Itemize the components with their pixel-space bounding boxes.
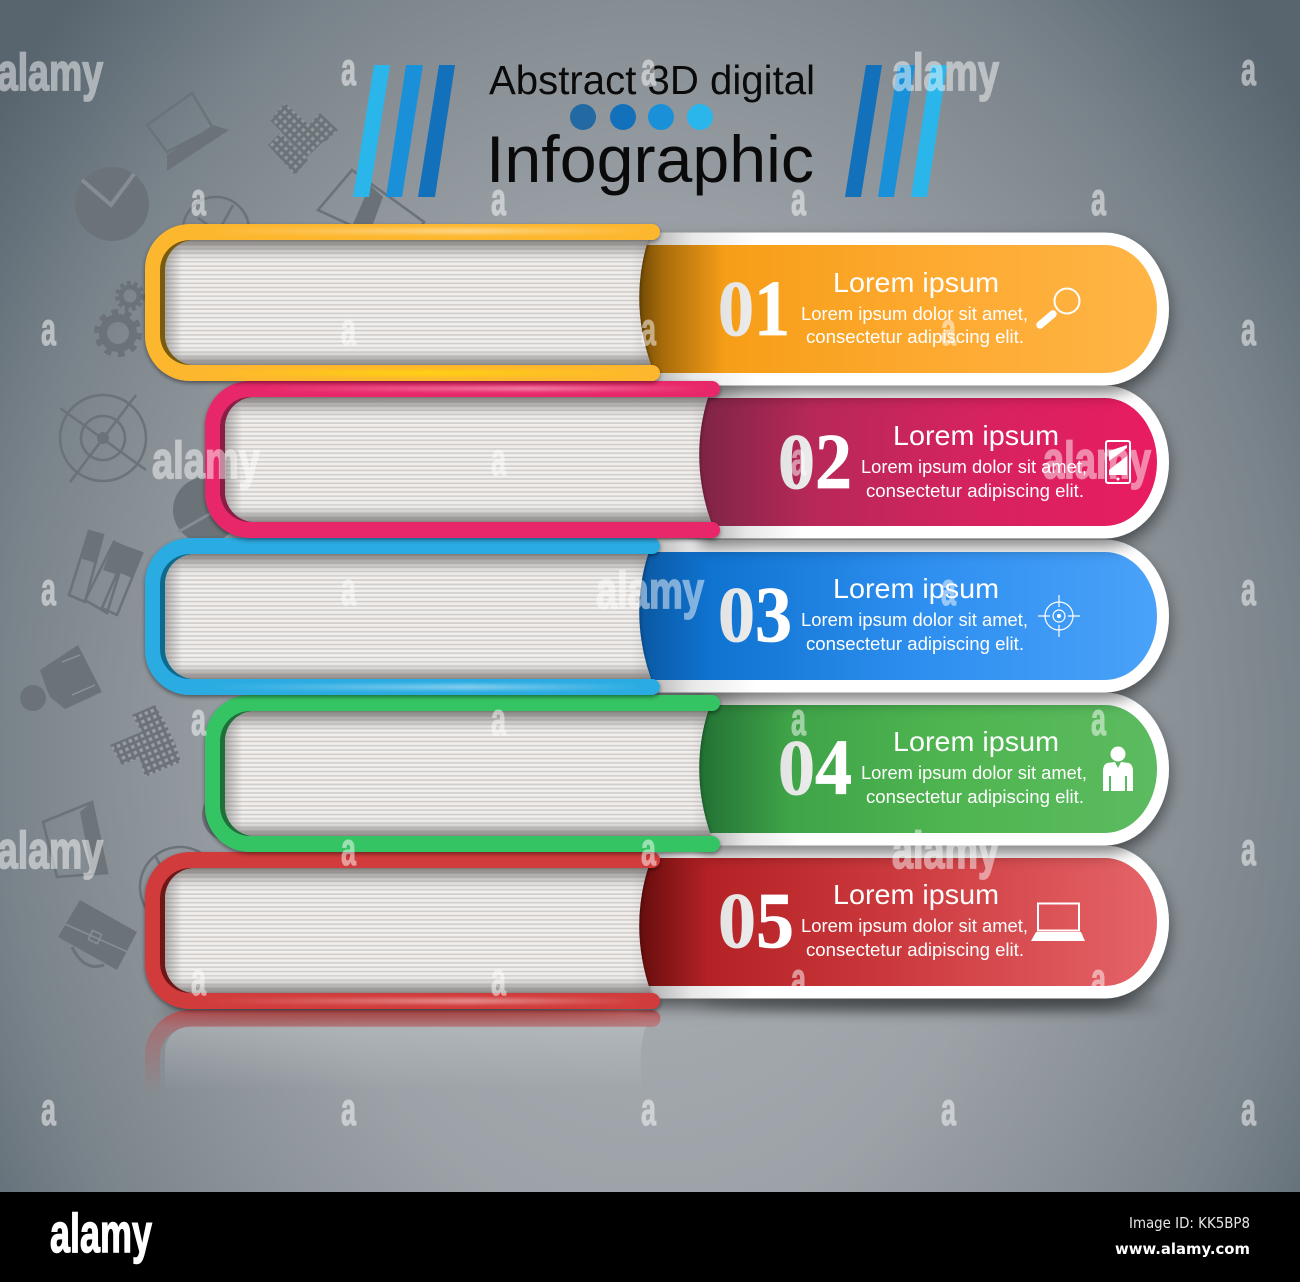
number 02: 02	[778, 419, 852, 506]
watermark letters: a	[1241, 43, 1256, 95]
icon: magnifier	[1040, 288, 1080, 325]
heading: Lorem ipsum	[833, 267, 999, 298]
watermark letters: a	[1091, 173, 1106, 225]
watermark words: alamy	[1043, 432, 1151, 490]
watermark letters: a	[341, 303, 356, 355]
text block: Lorem ipsum dolor sit amet,	[861, 457, 1087, 477]
text block: Lorem ipsum dolor sit amet,	[801, 610, 1028, 630]
watermark letters: a	[941, 1083, 956, 1135]
watermark words: alamy	[0, 44, 103, 102]
book 2: pink	[205, 381, 720, 538]
watermark letters: a	[1091, 953, 1106, 1005]
text block: Lorem ipsum dolor sit amet,	[861, 763, 1087, 783]
number 03: 03	[718, 572, 792, 659]
watermark words: alamy	[596, 562, 704, 620]
stripes right	[845, 65, 947, 197]
watermark words: alamy	[152, 432, 260, 490]
heading: Lorem ipsum	[833, 879, 999, 910]
title line 1: Abstract 3D digital	[489, 57, 815, 103]
icon: gears	[97, 283, 143, 354]
text block: consectetur adipiscing elit.	[806, 634, 1024, 654]
tab 1	[637, 232, 1169, 386]
number 05: 05	[718, 878, 794, 965]
footer bar	[0, 1192, 1300, 1282]
text block: consectetur adipiscing elit.	[866, 787, 1084, 807]
icon: target	[1038, 595, 1080, 637]
tab 3	[637, 540, 1169, 692]
watermark letters: a	[491, 433, 506, 485]
watermark letters: a	[1241, 823, 1256, 875]
icon: laptop	[147, 93, 229, 171]
book 4: green	[205, 695, 720, 852]
watermark letters: a	[791, 433, 806, 485]
icon: open book	[43, 802, 107, 877]
tab 5	[637, 846, 1169, 998]
text block	[801, 916, 1028, 960]
watermark letters: a	[1091, 693, 1106, 745]
icon: circle behind book	[202, 789, 254, 841]
watermark letters: a	[341, 43, 356, 95]
book 1: yellow	[145, 224, 660, 381]
website: www.alamy.com	[1115, 1240, 1250, 1258]
title line 2: Infographic	[486, 122, 814, 196]
book 3: blue	[145, 538, 660, 695]
watermark letters: a	[191, 953, 206, 1005]
watermark letters: a	[1241, 303, 1256, 355]
watermark letters: a	[641, 43, 656, 95]
text block	[861, 457, 1087, 501]
watermark letters	[41, 43, 1256, 1135]
icon: person	[20, 645, 102, 711]
title dots	[570, 104, 713, 130]
icon: keyboard	[268, 103, 338, 175]
icon: tablet	[318, 170, 424, 250]
book 5: red	[145, 852, 660, 1009]
text block: Lorem ipsum dolor sit amet,	[801, 304, 1028, 324]
watermark letters: a	[341, 823, 356, 875]
heading: Lorem ipsum	[833, 573, 999, 604]
watermark words: alamy	[892, 44, 999, 102]
watermark letters: a	[41, 303, 56, 355]
watermark letters: a	[491, 693, 506, 745]
watermark words	[0, 44, 1151, 880]
reflection of book	[145, 1010, 660, 1100]
watermark letters: a	[941, 563, 956, 615]
icon: person	[1103, 746, 1133, 791]
image id: Image ID: KK5BP8	[1129, 1214, 1250, 1232]
watermark letters: a	[191, 173, 206, 225]
icon: binders	[69, 531, 142, 615]
footer logo: alamy	[50, 1202, 152, 1264]
icon: keyboard 2	[110, 705, 181, 777]
watermark words: alamy	[0, 822, 103, 880]
heading: Lorem ipsum	[893, 420, 1059, 451]
watermark letters: a	[791, 953, 806, 1005]
icon: outline circle	[140, 847, 220, 927]
heading: Lorem ipsum	[893, 726, 1059, 757]
icon: tablet	[1106, 441, 1130, 483]
watermark letters: a	[641, 1083, 656, 1135]
tab 4	[697, 692, 1169, 846]
floor shadow	[160, 998, 1160, 1015]
stripes left	[353, 65, 455, 197]
background icons	[20, 93, 424, 970]
watermark letters: a	[791, 173, 806, 225]
watermark letters: a	[341, 563, 356, 615]
number 04: 04	[778, 725, 852, 812]
watermark letters: a	[491, 173, 506, 225]
watermark letters: a	[1241, 563, 1256, 615]
icon: pie chart	[75, 167, 149, 241]
watermark words: alamy	[892, 822, 999, 880]
icon: pie chart 2	[173, 477, 239, 543]
text block: consectetur adipiscing elit.	[806, 940, 1024, 960]
watermark letters: a	[641, 823, 656, 875]
watermark letters: a	[41, 1083, 56, 1135]
watermark letters: a	[941, 303, 956, 355]
watermark letters: a	[491, 953, 506, 1005]
watermark letters: a	[341, 1083, 356, 1135]
icon: target	[60, 395, 146, 482]
tab 2	[697, 386, 1169, 538]
icon: laptop	[1031, 904, 1085, 941]
text block	[801, 304, 1028, 347]
title	[353, 57, 947, 197]
text block: consectetur adipiscing elit.	[866, 481, 1084, 501]
watermark letters: a	[641, 303, 656, 355]
text block	[861, 763, 1087, 807]
text block: consectetur adipiscing elit.	[806, 327, 1024, 347]
watermark letters: a	[191, 693, 206, 745]
text block: Lorem ipsum dolor sit amet,	[801, 916, 1028, 936]
watermark letters: a	[791, 693, 806, 745]
watermark letters: a	[41, 563, 56, 615]
number 01: 01	[718, 266, 790, 353]
text block	[801, 610, 1028, 654]
watermark letters: a	[1241, 1083, 1256, 1135]
icon: outline pie chart	[183, 197, 249, 263]
icon: briefcase	[58, 900, 137, 970]
